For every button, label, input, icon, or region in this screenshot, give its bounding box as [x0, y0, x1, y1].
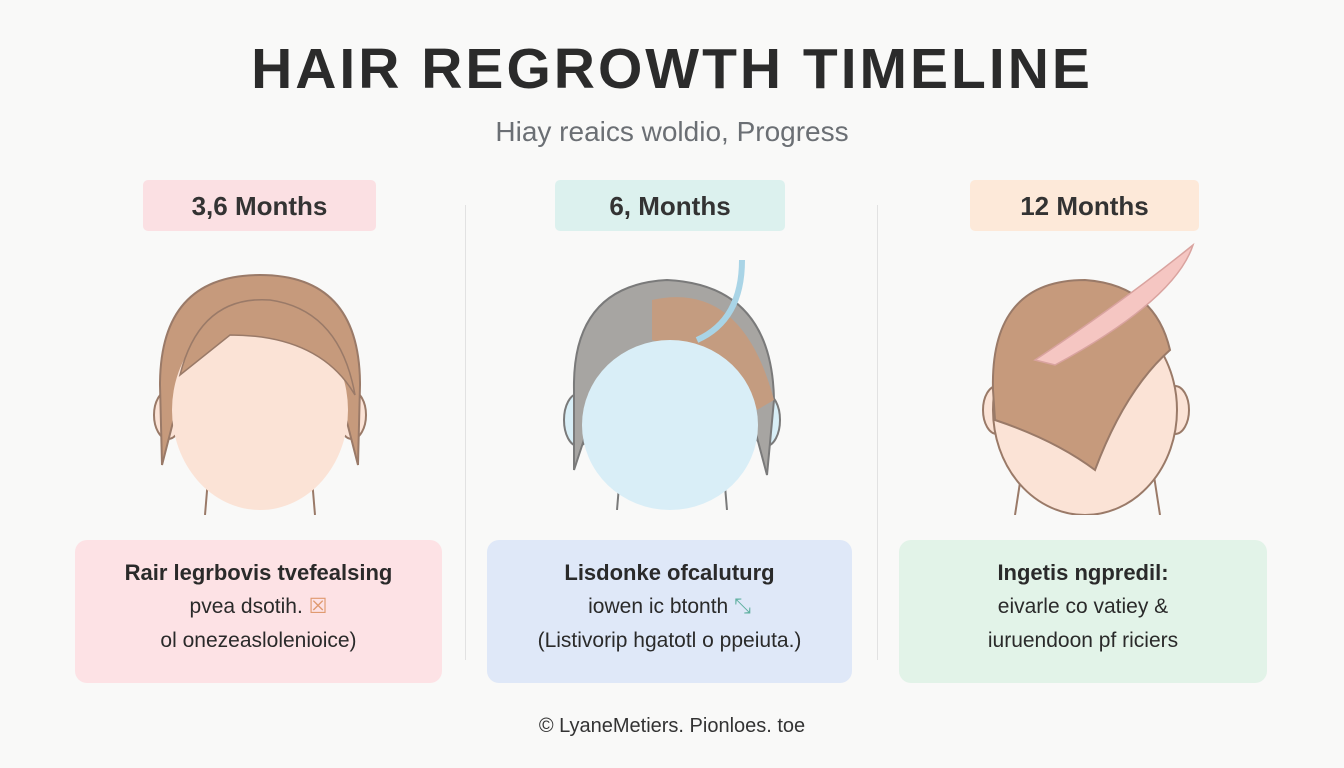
panel: 6 months text: iowen ic btonth ⤡ — [588, 595, 751, 618]
label: 12 months: 12 Months — [1020, 191, 1149, 221]
label: 3,6 months: 3,6 Months — [192, 191, 327, 221]
panel: 3,6 months text: pvea dsotih. ☒ — [190, 595, 327, 618]
icon: head 2 — [563, 260, 781, 510]
label: 6 months — [555, 180, 785, 231]
panel: 6 months text: (Listivorip hgatotl o ppeiuta.) — [538, 629, 801, 652]
panel: 3,6 months text: Rair legrbovis tvefealsing — [125, 560, 392, 585]
panel: 12 months text: iuruendoon pf riciers — [988, 629, 1178, 652]
label: 6 months: 6, Months — [609, 191, 731, 221]
panel: 12 months text — [899, 540, 1267, 683]
panel: 6 months text — [487, 540, 852, 683]
title: HAIR REGROWTH TIMELINE — [251, 37, 1093, 101]
icon: head 1 — [153, 274, 367, 515]
panel: 3,6 months text — [75, 540, 442, 683]
footer: © LyaneMetiers. Pionloes. toe — [539, 715, 805, 737]
panel: 6 months text: Lisdonke ofcaluturg — [564, 560, 775, 585]
subtitle: Hiay reaics woldio, Progress — [495, 116, 849, 147]
label: 3,6 months — [143, 180, 376, 231]
panel: 3,6 months text: ol onezeaslolenioice) — [160, 629, 357, 652]
panel: 12 months text: Ingetis ngpredil: — [997, 560, 1169, 585]
panel: 12 months text: eivarle co vatiey & — [998, 595, 1168, 618]
icon: head 3 — [982, 243, 1194, 515]
label: 12 months — [970, 180, 1199, 231]
